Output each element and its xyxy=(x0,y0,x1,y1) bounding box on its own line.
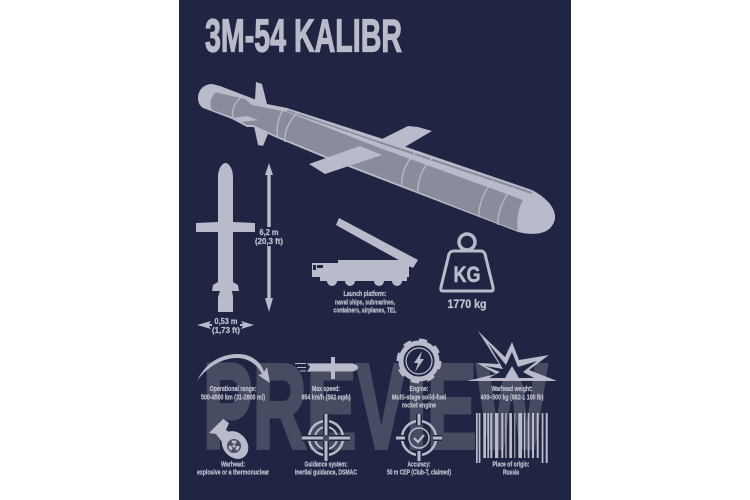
icon: range arc xyxy=(197,354,270,383)
guidance text xyxy=(295,462,357,476)
watermark: PREVIEW xyxy=(203,338,547,474)
icon: barcode xyxy=(476,413,548,463)
height label: 6,2 m xyxy=(260,228,278,237)
engine text: Multi-stage solid-fuel xyxy=(392,394,446,402)
icon: explosion xyxy=(467,331,557,381)
warhead weight text: Warhead weight: xyxy=(492,386,532,393)
engine text: Engine: xyxy=(410,386,428,393)
missile illustration xyxy=(198,82,555,234)
engine text: rocket engine xyxy=(402,402,436,410)
accuracy text: 50 m CEP (Club-T, claimed) xyxy=(387,470,451,476)
icon: accuracy target xyxy=(396,414,442,461)
width label: (1,73 ft) xyxy=(212,326,240,335)
warhead text xyxy=(197,462,269,476)
launch platform text xyxy=(334,291,397,314)
icon: launcher truck xyxy=(312,218,418,286)
warhead weight text xyxy=(480,386,544,402)
guidance text: Guidance system: xyxy=(304,462,348,468)
engine text xyxy=(392,386,446,410)
height label xyxy=(255,228,283,246)
icon: weight xyxy=(441,234,493,291)
warhead text: explosive or a thermonuclear xyxy=(197,470,269,476)
icon: nuclear bomb xyxy=(209,419,254,464)
max speed text: Max speed: xyxy=(312,386,340,393)
width label xyxy=(212,317,240,335)
operational range text xyxy=(201,386,265,402)
title: 3M-54 KALIBR xyxy=(205,10,402,62)
icon: speeding missile xyxy=(295,357,358,379)
height arrow xyxy=(265,163,273,312)
max speed text xyxy=(302,386,350,402)
place of origin text: Place of origin: xyxy=(492,462,530,468)
accuracy text xyxy=(387,462,451,476)
max speed text: 954 km/h (592 mph) xyxy=(302,394,350,402)
width label: 0,53 m xyxy=(214,317,238,326)
guidance text: Inertial guidance, DSMAC xyxy=(295,470,357,476)
panel: background xyxy=(179,0,571,500)
width arrows xyxy=(197,321,254,329)
operational range text: 500-4500 km (31-2800 mi) xyxy=(201,394,265,402)
vertical missile silhouette xyxy=(196,163,255,312)
operational range text: Operational range: xyxy=(210,386,256,393)
icon: engine gear xyxy=(400,342,438,380)
launch platform text: naval ships, submarines, xyxy=(335,300,395,306)
place of origin text: Russia xyxy=(503,470,519,476)
warhead weight text: 400–500 kg (882-1 100 lb) xyxy=(480,394,544,402)
height label: (20,3 ft) xyxy=(255,237,283,246)
weight value: 1770 kg xyxy=(448,297,486,311)
accuracy text: Accuracy: xyxy=(408,462,430,468)
launch platform text: Launch platform: xyxy=(344,291,386,298)
warhead text: Warhead: xyxy=(221,462,245,468)
launch platform text: containers, airplanes, TEL xyxy=(334,308,397,314)
icon: weight: KG xyxy=(454,262,480,287)
place of origin text xyxy=(492,462,530,476)
icon: guidance crosshair xyxy=(302,414,350,461)
